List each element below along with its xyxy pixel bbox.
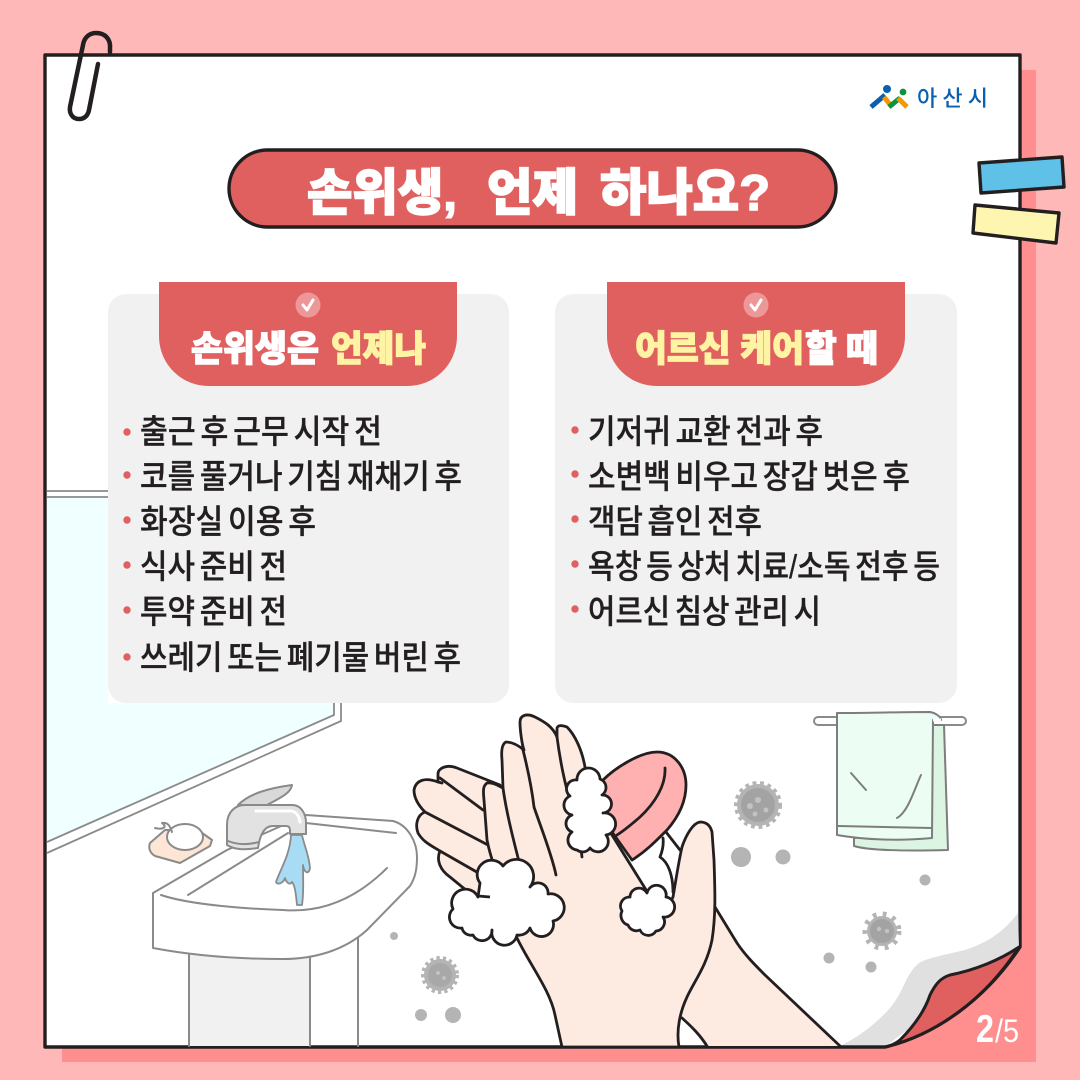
- list: always: 출근 후 근무 시작 전: [140, 413, 382, 450]
- sticky tab blue: [979, 157, 1064, 193]
- logo mark: [871, 85, 907, 107]
- bathroom mirror: [47, 491, 341, 853]
- towel front layer: [837, 712, 941, 840]
- list: elder care: [571, 413, 940, 630]
- finger lines: [503, 737, 582, 875]
- list: elder care: 욕창 등 상처 치료/소독 전후 등: [588, 548, 940, 585]
- heading text: 어르신 케어: [635, 328, 804, 369]
- foam bubble right: [620, 885, 675, 935]
- title text: 언제: [487, 165, 578, 221]
- virus bottom: [424, 959, 456, 991]
- page number: [976, 1008, 1019, 1051]
- sticky tab yellow: [973, 205, 1059, 243]
- water stream: [276, 835, 310, 905]
- virus large: [737, 784, 779, 826]
- panel: always: [108, 282, 509, 703]
- panel: always: 언제나: [331, 328, 426, 369]
- page curl flap: [885, 947, 1019, 1047]
- soap dish: [149, 823, 212, 863]
- logo: Asan city: [871, 85, 988, 111]
- page number: /5: [995, 1013, 1019, 1049]
- foam bubble finger: [564, 768, 616, 852]
- foam behind thumb: [660, 832, 680, 892]
- list: elder care: 어르신 침상 관리 시: [588, 593, 821, 630]
- washbasin: [149, 785, 417, 1046]
- paperclip: [70, 33, 110, 119]
- list: elder care: 기저귀 교환 전과 후: [588, 413, 823, 450]
- front hand: [483, 715, 715, 1047]
- logo text: 아산시: [917, 86, 988, 111]
- panel: elder care: [555, 282, 957, 703]
- title text: [307, 165, 770, 221]
- virus particles: [390, 784, 930, 1023]
- page curl shadow: [842, 913, 1019, 1045]
- list: always: 코를 풀거나 기침 재채기 후: [140, 458, 462, 495]
- list: always: 화장실 이용 후: [140, 503, 316, 540]
- title pill: [229, 150, 836, 227]
- list: elder care: 객담 흡인 전후: [588, 503, 762, 540]
- heading text: 손위생은: [191, 328, 319, 369]
- title text: 하나요?: [600, 165, 770, 221]
- list: always: 투약 준비 전: [140, 593, 287, 630]
- towel rod: [814, 717, 966, 725]
- heading tab: [159, 282, 457, 386]
- faucet: [227, 785, 306, 849]
- towel on rod: [814, 712, 966, 851]
- pedestal: [189, 938, 358, 1046]
- washing hands: [414, 715, 840, 1047]
- soap bar: [600, 752, 686, 860]
- icon: check: [296, 292, 320, 318]
- title text: 손위생,: [307, 165, 457, 221]
- list: elder care: 소변백 비우고 장갑 벗은 후: [588, 458, 910, 495]
- towel back layer: [854, 725, 948, 851]
- virus right: [866, 915, 898, 947]
- basin: [153, 815, 417, 959]
- heading tab: [607, 282, 905, 386]
- icon: check: [744, 292, 768, 318]
- page number: 2: [976, 1008, 994, 1051]
- list: always: 식사 준비 전: [140, 548, 287, 585]
- back hand fingers: [414, 766, 510, 895]
- list: always: 쓰레기 또는 폐기물 버린 후: [140, 639, 461, 676]
- arm behind: [682, 905, 840, 1046]
- list: always: [123, 413, 462, 676]
- foam bubble left: [449, 859, 564, 945]
- panel: elder care: 할 때: [805, 328, 878, 369]
